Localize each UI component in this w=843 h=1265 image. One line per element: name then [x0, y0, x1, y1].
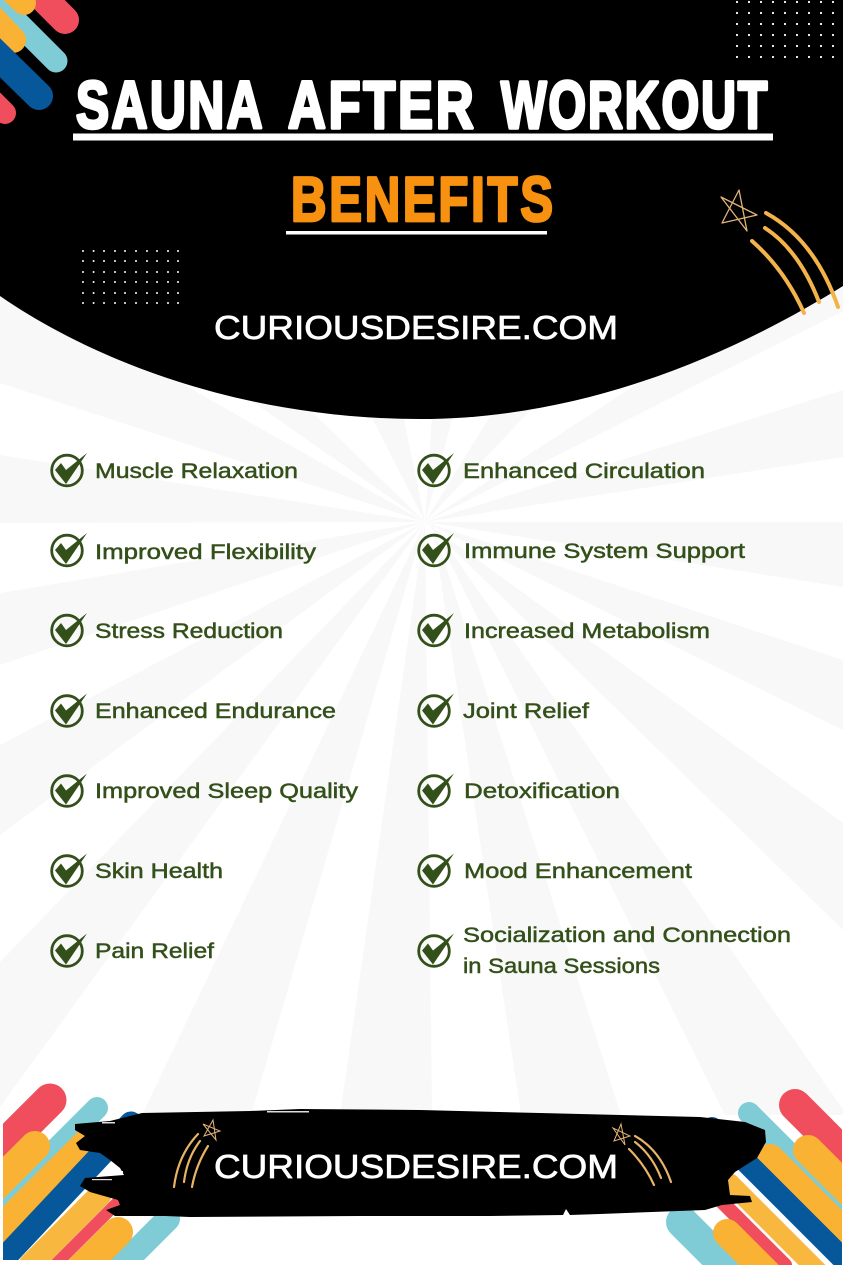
item: Pain Relief: Pain Relief [95, 939, 214, 963]
item: Improved Flexibility [52, 533, 316, 566]
item: Immune System Support: Immune System Support [464, 539, 745, 563]
icon: shooting star, header [721, 190, 838, 313]
item: Detoxification [419, 774, 620, 806]
item: Mood Enhancement [419, 854, 692, 886]
item: Mood Enhancement: Mood Enhancement [464, 859, 692, 883]
benefits list: right column [419, 453, 791, 978]
item: Enhanced Endurance: Enhanced Endurance [95, 699, 336, 723]
decoration: top-right dot grid [736, 1, 834, 58]
title underline [73, 134, 773, 140]
item: Enhanced Circulation: Enhanced Circulation [463, 459, 705, 483]
item: Stress Reduction: Stress Reduction [95, 619, 283, 643]
item: Socialization and Connection in Sauna Sessions: Socialization and Connection [463, 923, 791, 947]
item: Muscle Relaxation: Muscle Relaxation [95, 459, 298, 483]
footer: black brush banner [75, 1109, 766, 1217]
item: Immune System Support [419, 533, 745, 566]
item: Increased Metabolism: Increased Metabolism [464, 619, 710, 643]
item: Enhanced Circulation [419, 453, 705, 486]
item: Joint Relief [419, 694, 589, 726]
title: Sauna After Workout: WORKOUT [501, 68, 768, 143]
item: Socialization and Connection in Sauna Sessions [419, 923, 791, 978]
item: Detoxification: Detoxification [464, 779, 620, 803]
item: Improved Sleep Quality [52, 774, 358, 806]
item: Stress Reduction [52, 613, 283, 646]
benefits list: left column [52, 453, 358, 966]
icon: shooting star, footer left [174, 1120, 220, 1187]
decoration: bottom-right colour stripes [666, 1089, 842, 1265]
header: black curved panel [0, 0, 843, 419]
title: Sauna After Workout: AFTER [288, 68, 474, 142]
item: Muscle Relaxation [52, 453, 298, 486]
item: Improved Sleep Quality: Improved Sleep Quality [95, 779, 358, 803]
decoration: top-left colour stripes [0, 0, 65, 113]
item: Skin Health: Skin Health [95, 859, 223, 883]
website label: header: CURIOUSDESIRE.COM [214, 309, 618, 346]
item: Increased Metabolism [419, 613, 710, 646]
decoration: left dot grid [82, 250, 179, 304]
item: Joint Relief: Joint Relief [463, 699, 589, 723]
heading underline [286, 231, 547, 234]
item: Enhanced Endurance [52, 694, 336, 726]
website label: footer: CURIOUSDESIRE.COM [214, 1148, 618, 1185]
title: Sauna After Workout [76, 68, 768, 143]
footer brush highlights [92, 1111, 309, 1180]
item: Skin Health [52, 854, 223, 886]
item: Socialization and Connection in Sauna Sessions: in Sauna Sessions [463, 954, 660, 978]
decoration: bottom-left colour stripes [3, 1084, 180, 1260]
title: Sauna After Workout: SAUNA [76, 69, 262, 143]
heading: Benefits: BENEFITS [291, 164, 553, 234]
background: sunburst rays [0, 250, 843, 1115]
icon: shooting star, footer right [613, 1124, 671, 1185]
item: Pain Relief [52, 934, 214, 966]
item: Improved Flexibility: Improved Flexibility [95, 540, 316, 564]
